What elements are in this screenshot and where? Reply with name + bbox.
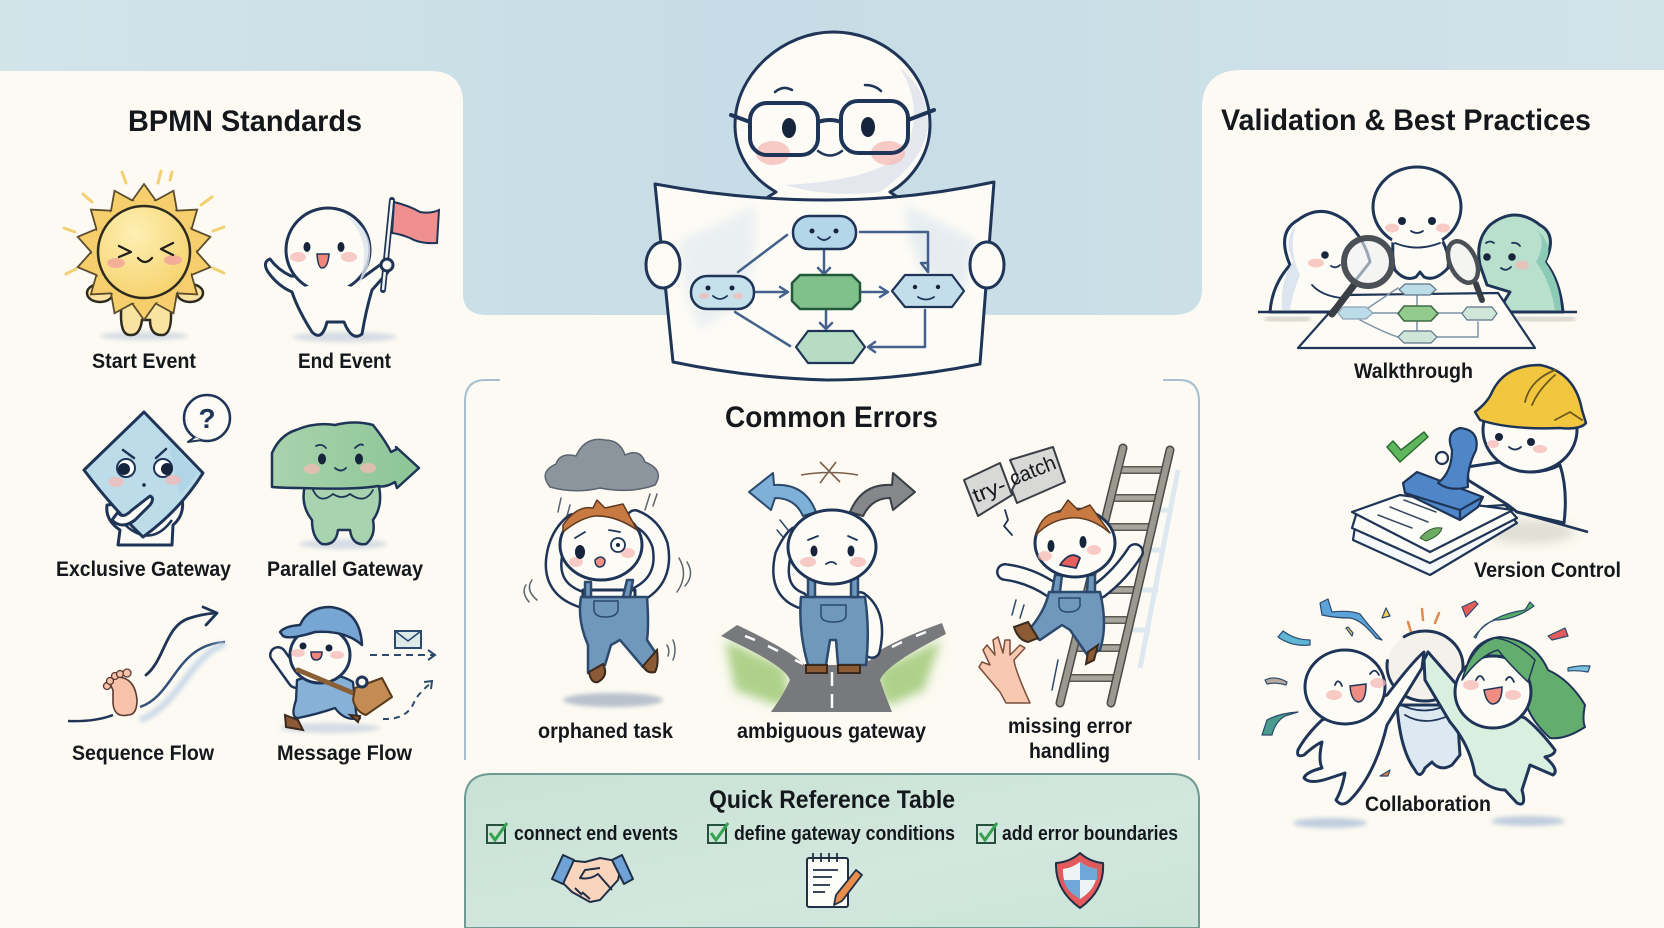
- panel: BPMN Standards: [56, 105, 439, 765]
- blue left arrow: [749, 473, 816, 516]
- illustration: version control stamp: [1352, 365, 1588, 575]
- panel: Validation & Best Practices: [1221, 104, 1621, 828]
- icon: sequence flow foot and path: [68, 607, 225, 721]
- ladder: [1060, 448, 1178, 703]
- rain cloud: [545, 439, 658, 491]
- icon: message flow courier: [278, 607, 435, 733]
- reaching hand: [979, 637, 1030, 703]
- hard hat head: [1475, 365, 1586, 472]
- flow node: left pill: [691, 276, 754, 309]
- hero head with glasses: [731, 32, 934, 202]
- flow node: right hexagon: [892, 275, 964, 307]
- label: Message Flow: Message Flow: [277, 742, 413, 765]
- flow node: centre green task: [792, 275, 860, 309]
- paper stack: [1352, 495, 1517, 575]
- worker body: [1467, 462, 1565, 523]
- broken try-catch sign: try-: [969, 474, 1009, 508]
- flow node: top pill: [793, 216, 856, 249]
- illustration: orphaned task: [524, 439, 691, 707]
- road fork: [721, 623, 946, 712]
- label: missing error handling: handling: [1029, 740, 1110, 763]
- label: Start Event: Start Event: [92, 350, 196, 373]
- label: Version Control: Version Control: [1474, 559, 1621, 582]
- checklist item: add error boundaries: add error boundaries: [1002, 823, 1178, 845]
- checklist item: connect end events: connect end events: [514, 823, 678, 845]
- checklist item: define gateway conditions: define gateway conditions: [734, 823, 955, 845]
- broken try-catch sign: catch: [1006, 451, 1059, 491]
- label: Sequence Flow: Sequence Flow: [72, 742, 215, 765]
- right friend with green hair: [1424, 637, 1585, 804]
- hero: character holding BPMN diagram: [646, 32, 1004, 380]
- hero paper flowchart: [646, 182, 1004, 380]
- worried worker character: [524, 494, 691, 682]
- confetti: [1262, 599, 1590, 776]
- centre reviewer: [1373, 167, 1461, 278]
- icon: start event sun: [64, 171, 224, 340]
- illustration: ambiguous gateway: [721, 462, 946, 712]
- magnifying glasses: [1332, 237, 1484, 314]
- heading: Common Errors: Common Errors: [725, 401, 938, 434]
- illustration: walkthrough: [1258, 167, 1577, 348]
- label: Collaboration: Collaboration: [1365, 793, 1491, 816]
- left friend: [1298, 650, 1424, 804]
- icon: notepad with pencil: [807, 853, 862, 907]
- icon: exclusive gateway diamond character: [84, 395, 230, 545]
- left reviewer: [1270, 211, 1370, 312]
- icon: handshake: [552, 855, 633, 902]
- broken try-catch sign: [964, 447, 1065, 535]
- heading: BPMN Standards: BPMN Standards: [128, 105, 362, 138]
- grey right arrow: [850, 473, 915, 516]
- label: Exclusive Gateway: Exclusive Gateway: [56, 558, 231, 581]
- label: missing error handling: missing error: [1008, 715, 1132, 738]
- flow node: bottom hexagon: [796, 331, 865, 363]
- illustration: missing error handling: [964, 447, 1178, 703]
- icon: exclusive gateway diamond character: ?: [198, 403, 216, 434]
- label: Walkthrough: Walkthrough: [1354, 360, 1473, 383]
- icon: shield: [1056, 853, 1103, 908]
- label: End Event: End Event: [298, 350, 391, 373]
- panel: Common Errors frame: [465, 380, 1199, 760]
- label: orphaned task: orphaned task: [538, 720, 673, 743]
- green tick: [1387, 432, 1428, 462]
- icon: end event character with flag: [265, 200, 439, 342]
- right reviewer: [1479, 215, 1563, 312]
- heading: Validation & Best Practices: Validation & Best Practices: [1221, 104, 1591, 137]
- icon: parallel gateway green character: [272, 422, 419, 549]
- label: ambiguous gateway: ambiguous gateway: [737, 720, 926, 743]
- label: Parallel Gateway: Parallel Gateway: [267, 558, 423, 581]
- heading: Quick Reference Table: Quick Reference Table: [709, 786, 955, 814]
- illustration: collaboration high five: [1262, 599, 1590, 828]
- stamp: [1403, 428, 1483, 520]
- flowchart sheet on table: [1298, 284, 1535, 348]
- sky blue backdrop around panels: [0, 0, 1664, 315]
- panel: Quick Reference Table: [465, 774, 1199, 928]
- middle friend: [1387, 631, 1463, 775]
